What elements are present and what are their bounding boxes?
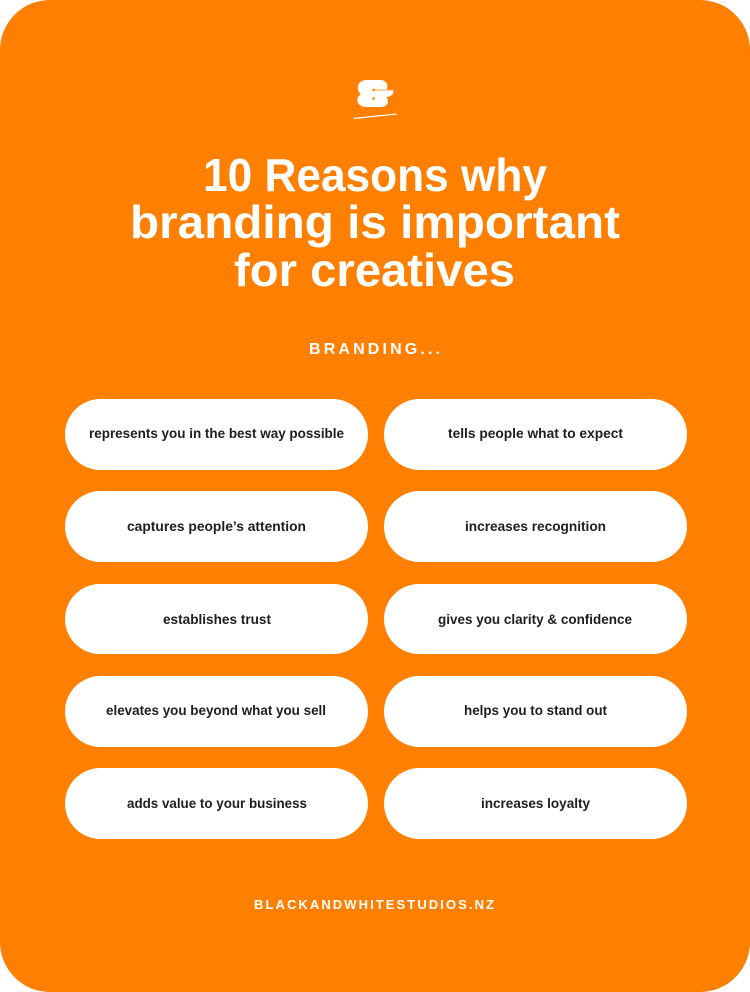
pill: increases loyalty [384,768,687,839]
pill: captures attention: captures people’s attention [127,519,306,534]
pill: elevates you: elevates you beyond what you sell [106,703,326,718]
pill: represents you: represents you in the best way possible [89,426,344,441]
title: 10 Reasons why [203,149,547,201]
pill: stand out [384,676,687,747]
pill: tells people: tells people what to expect [448,426,624,441]
pill: clarity and confidence: gives you clarity & confidence [438,612,632,627]
pill: increases recognition: increases recognition [465,519,606,534]
title [130,149,620,296]
pill: establishes trust: establishes trust [163,612,271,627]
title: for creatives [234,244,515,296]
pill: increases recognition [384,491,687,562]
pill: stand out: helps you to stand out [464,703,607,718]
pill: clarity and confidence [384,584,687,654]
pill: adds value [65,768,368,839]
pill: represents you [65,399,368,470]
footer url: BLACKANDWHITESTUDIOS.NZ [254,897,494,912]
icon: ampersand logo [354,80,396,118]
subheading: BRANDING... [309,341,440,358]
pill: increases loyalty: increases loyalty [481,796,590,811]
pill: captures attention [65,491,368,562]
panel: right column reasons [384,399,687,839]
title: branding is important [130,196,620,248]
panel: left column reasons [65,399,368,839]
pill: elevates you [65,676,368,747]
pill: establishes trust [65,584,368,654]
pill: tells people [384,399,687,470]
pill: adds value: adds value to your business [127,796,307,811]
